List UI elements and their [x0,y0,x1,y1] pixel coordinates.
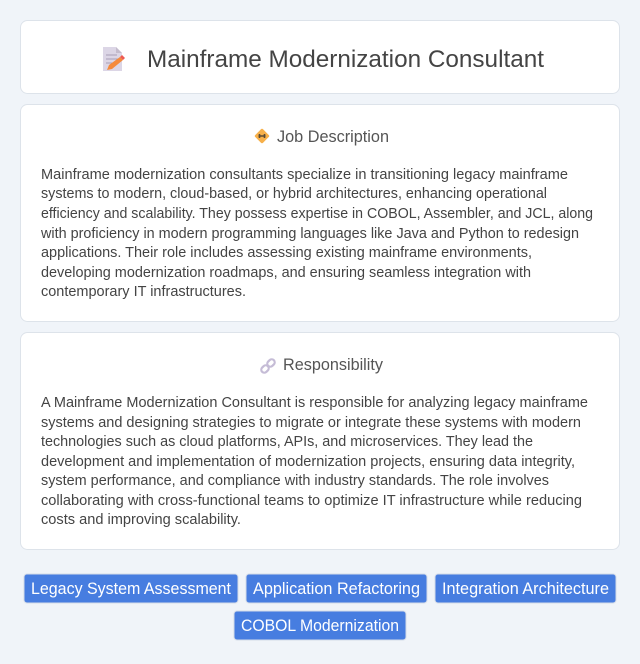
text block: responsibility: A Mainframe Modernization Consultant is responsible for analyzing legacy mainframe [41,395,588,411]
text block: job description: efficiency and scalability. They possess expertise in COBOL, Assembler, and JCL, along [41,206,593,222]
text block: job description: contemporary IT infrastructures. [41,284,246,300]
icon: chain link [260,358,276,374]
text block: job description: Mainframe modernization consultants specialize in transitioning legacy mainframe [41,167,568,183]
tag: integration architecture [435,574,616,603]
text block: responsibility: collaborating with cross-functional teams to optimize IT infrastructure while reducing [41,493,582,509]
text block: job description: systems to modern, cloud-based, or hybrid architectures, enhancing operational [41,186,547,202]
tag: integration architecture: Integration Architecture [442,580,609,598]
text block: responsibility: systems and designing strategies to migrate or integrate these systems with modern [41,415,581,431]
text block: responsibility: development and implementation of modernization projects, ensuring data integrity, [41,454,575,470]
icon: orange diamond [254,128,270,144]
tag: legacy system assessment [24,574,238,603]
title: Mainframe Modernization Consultant [147,46,544,73]
text block: responsibility [41,395,588,528]
tag: cobol modernization: COBOL Modernization [241,617,399,635]
tag: application refactoring [246,574,427,603]
text block: job description: with proficiency in modern programming languages like Java and Python to redesign [40,226,579,242]
icon: document with pencil [103,47,125,71]
panel: title card [20,20,620,94]
text block: job description: applications. Their role includes assessing existing mainframe environments, [41,245,532,261]
panel: responsibility [20,332,620,550]
text block: job description: developing modernization roadmaps, and ensuring seamless integration with [41,265,531,281]
text block: responsibility: system performance, and compliance with industry standards. The role involves [41,473,549,489]
text block: job description [40,167,593,300]
heading: responsibility: Responsibility [283,356,384,374]
tag: application refactoring: Application Refactoring [253,580,420,598]
panel: job description [20,104,620,322]
text block: responsibility: costs and improving scalability. [41,512,241,528]
tag: cobol modernization [234,611,406,640]
tag: legacy system assessment: Legacy System Assessment [31,580,231,598]
text block: responsibility: technologies such as cloud platforms, APIs, and microservices. They lead the [41,434,533,450]
tags [24,574,616,640]
heading: job description: Job Description [277,128,389,146]
